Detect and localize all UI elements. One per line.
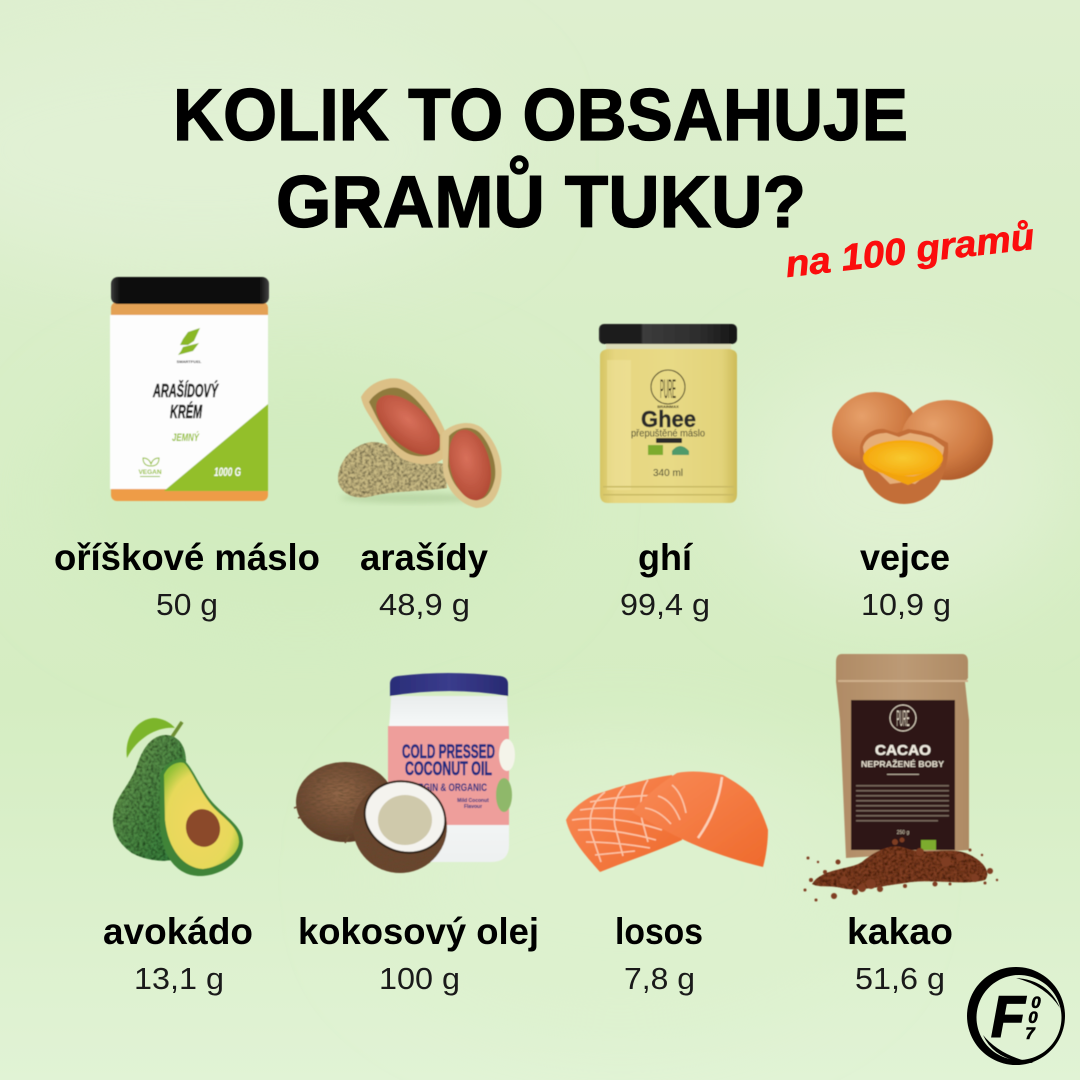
product: ghee jar: PURE [660,374,676,404]
product: cacao pouch [804,654,998,902]
product: peanut butter jar: KRÉM [170,401,203,422]
label: peanuts [360,537,488,622]
product: coconut oil: Flavour [464,804,482,810]
title: KOLIK TO OBSAHUJE [173,75,908,156]
label: cacao: 51,6 g [855,961,945,996]
product: peanut butter jar: VEGAN [138,469,162,476]
product: ghee jar: přepuštěné máslo [631,428,705,440]
product: coconut oil: VIRGIN & ORGANIC [410,782,487,794]
logo: F007 [967,967,1065,1065]
label: salmon [615,911,703,996]
title: GRAMŮ TUKU? [276,157,806,243]
product: peanut butter jar: ARAŠÍDOVÝ [152,380,219,401]
product: cacao pouch: 250 g [897,830,909,836]
label: ghee: 99,4 g [620,587,710,622]
product: eggs [832,392,993,504]
product: coconut oil: Mild Coconut [457,798,489,804]
label: cacao: kakao [847,911,953,952]
label: cacao [847,911,953,996]
label: salmon: 7,8 g [624,961,695,996]
product: avocado [113,718,243,876]
label: coconut oil [298,911,539,996]
label: eggs [860,537,951,622]
label: peanut butter [54,537,320,622]
product: ghee jar: BRAINMAX [657,404,679,409]
product: ghee jar [599,324,737,503]
product: cacao pouch: NEPRAŽENÉ BOBY [861,758,944,769]
label: ghee [620,537,710,622]
logo: F007: 0 [1028,1008,1038,1027]
label: coconut oil: 100 g [379,961,460,996]
product: peanut butter jar: SMARTFUEL [177,359,202,364]
label: eggs: vejce [860,537,950,578]
label: eggs: 10,9 g [861,587,951,622]
subtitle: per 100 grams: na 100 gramů [783,216,1036,285]
logo: F007: F [991,985,1026,1050]
product labels row 1 [54,537,951,622]
product: coconut oil: COLD PRESSED [402,742,495,763]
product: salmon [566,772,768,872]
label: peanut butter: oříškové máslo [54,537,320,578]
label: salmon: losos [615,911,703,952]
product: peanut butter jar: JEMNÝ [172,431,200,444]
title [173,75,908,243]
label: avocado: 13,1 g [134,961,224,996]
label: peanuts: 48,9 g [379,587,470,622]
product labels row 2 [103,911,953,996]
product: peanut butter jar: 1000 G [214,465,241,479]
product: peanut butter jar [110,277,269,501]
product: ghee jar: Ghee [641,406,696,432]
label: avocado [103,911,253,996]
label: peanuts: arašídy [360,537,488,578]
logo: F007: 0 [1031,993,1041,1012]
powder pile [804,838,998,902]
product: cacao pouch: PURE [896,706,910,731]
product: cacao pouch: CACAO [875,742,931,759]
label: coconut oil: kokosový olej [298,911,539,952]
label: ghee: ghí [638,537,694,578]
label: peanut butter: 50 g [156,587,218,622]
label: avocado: avokádo [103,911,253,952]
logo: F007: 7 [1025,1024,1036,1043]
product: coconut oil: COCONUT OIL [405,759,492,780]
product: ghee jar: 340 ml [653,468,683,479]
product: coconut oil [294,673,515,873]
product: peanuts [338,378,502,508]
